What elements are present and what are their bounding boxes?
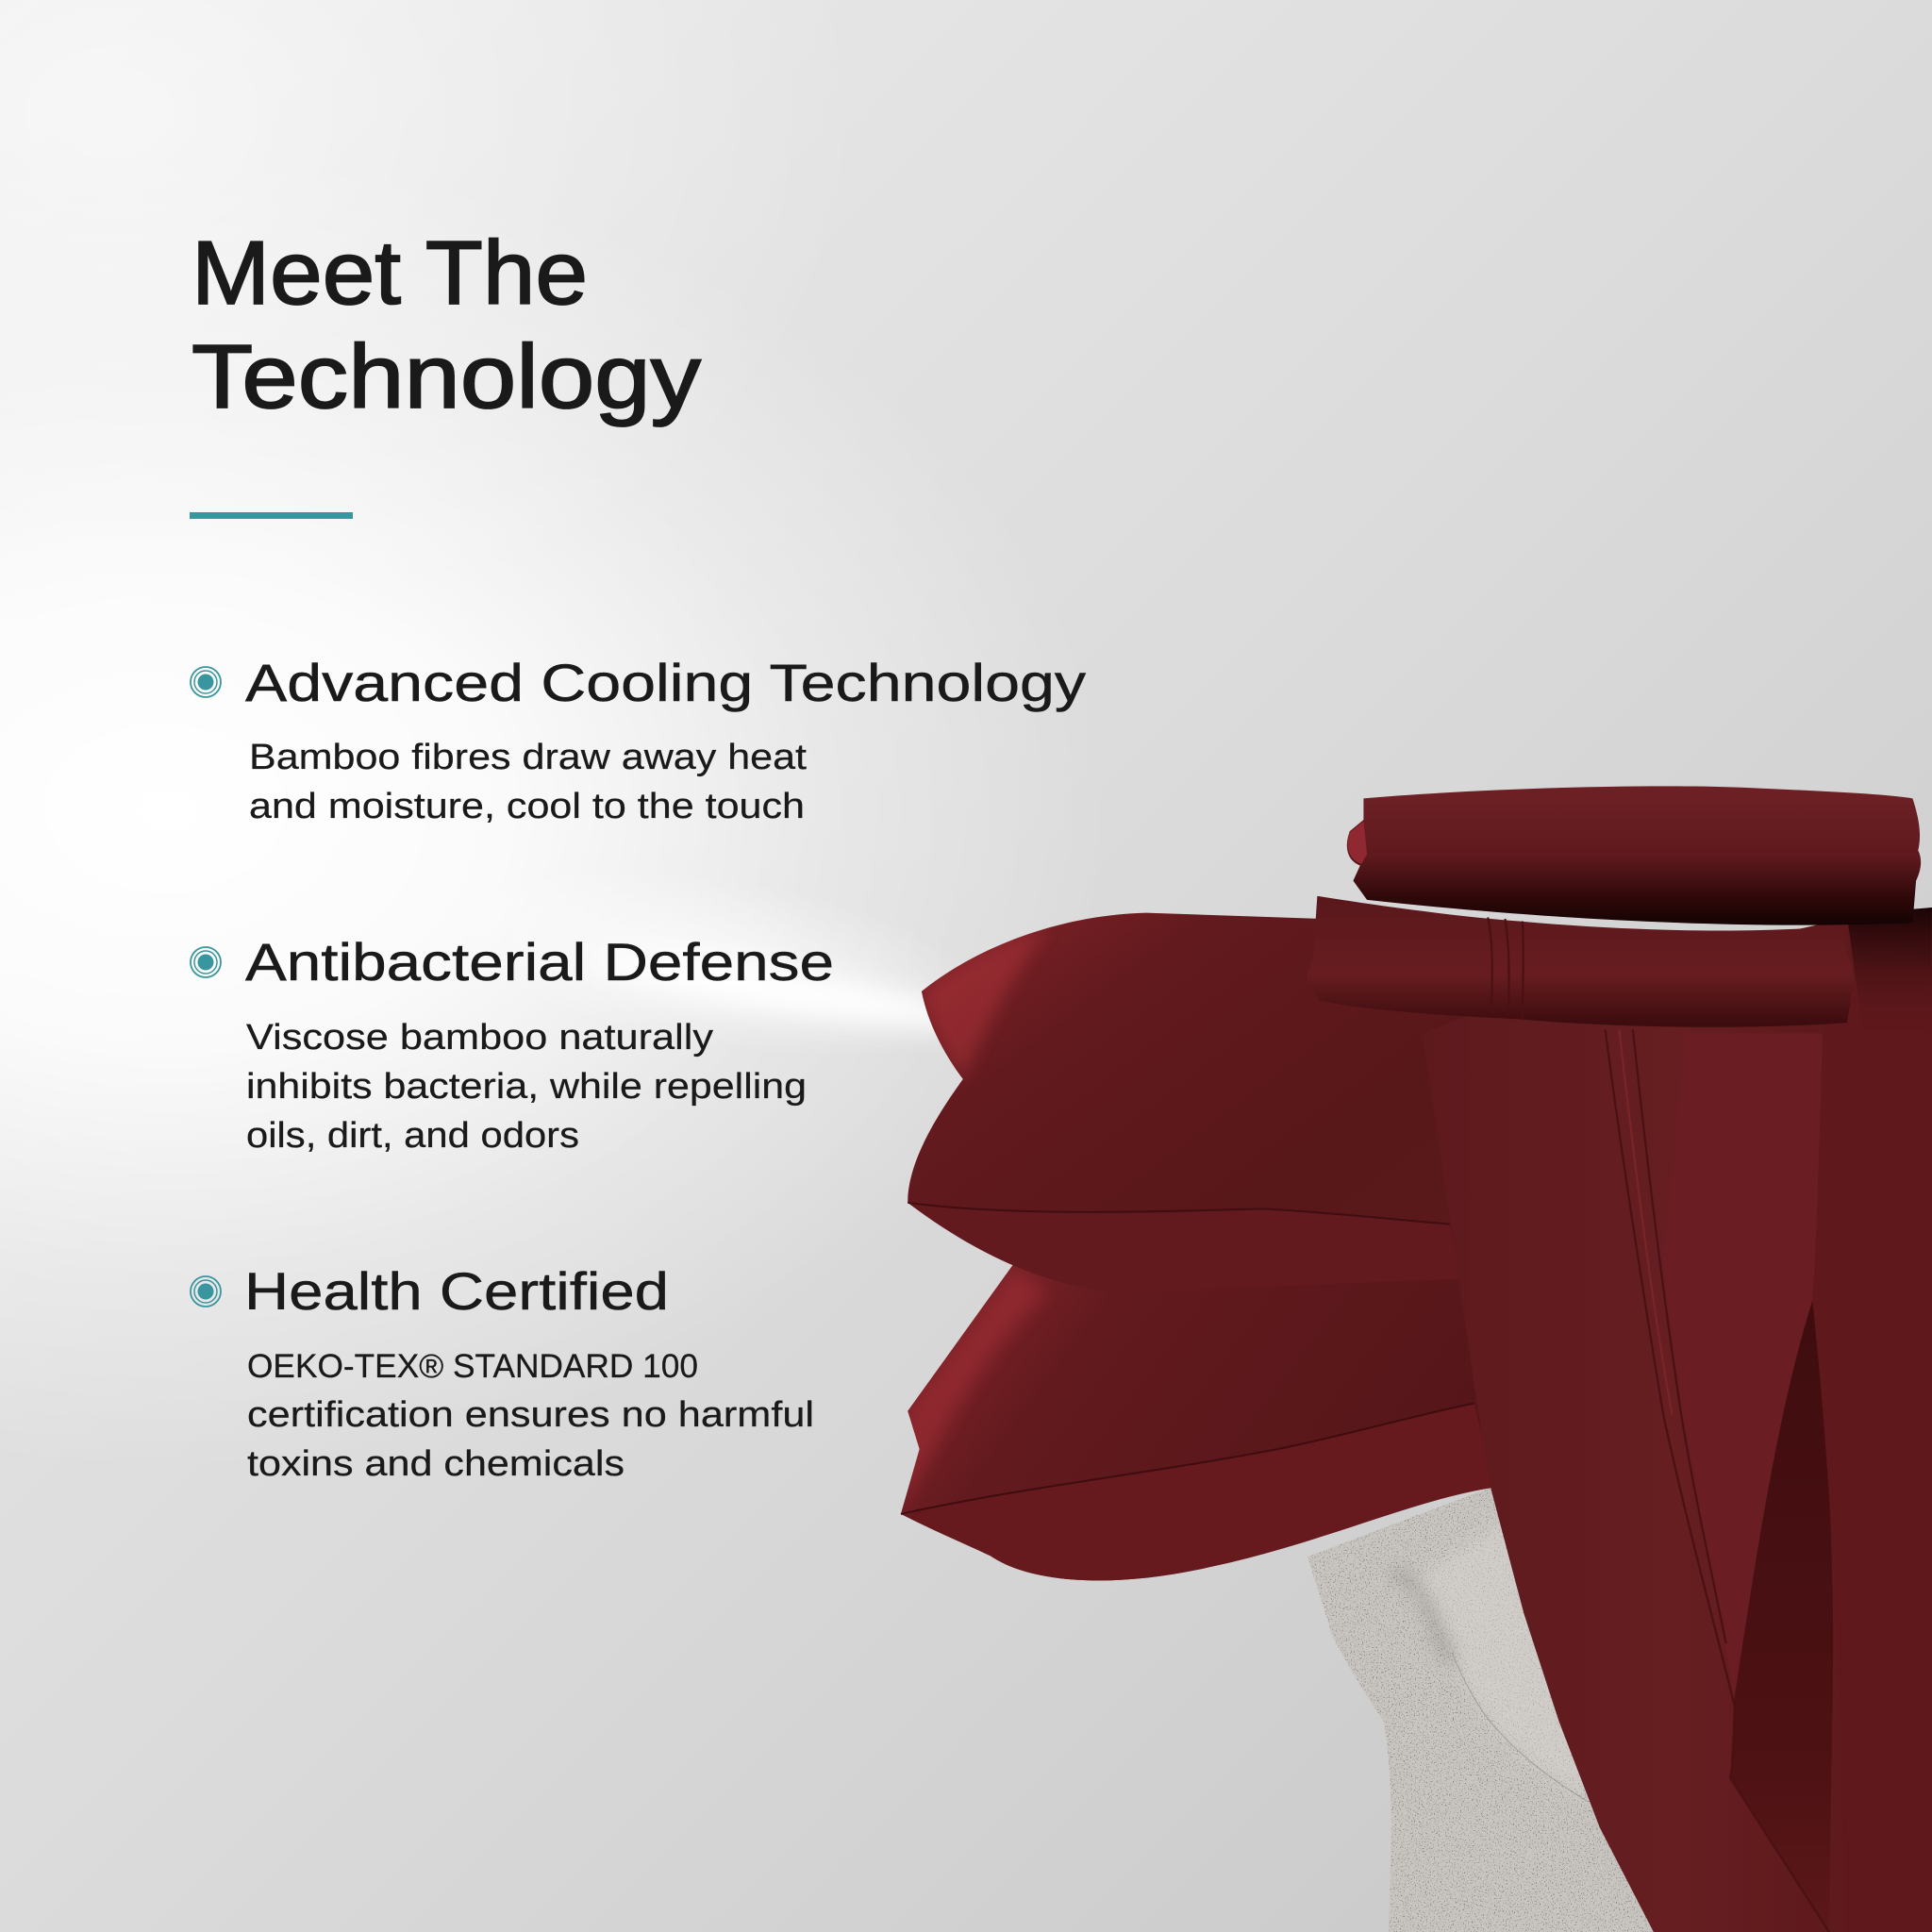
description: Bamboo fibres draw away heat <box>249 738 807 777</box>
heading: Advanced Cooling Technology <box>245 653 1086 712</box>
description <box>246 1018 807 1156</box>
lower pillow <box>901 1262 1495 1580</box>
description: and moisture, cool to the touch <box>249 787 805 826</box>
upper pillow <box>908 913 1466 1289</box>
heading: Antibacterial Defense <box>245 932 834 991</box>
description: OEKO-TEX® STANDARD 100 <box>247 1348 698 1385</box>
feature: advanced cooling <box>191 653 1086 826</box>
draped sheet <box>1423 908 1932 1932</box>
title divider <box>190 512 353 519</box>
title <box>192 223 701 427</box>
icon: target bullet <box>191 667 221 697</box>
folded pillowcase <box>1307 896 1854 1027</box>
icon: target bullet <box>191 947 221 977</box>
title: Meet The <box>192 223 588 324</box>
heading: Health Certified <box>244 1261 669 1321</box>
rolled sheet <box>1347 786 1921 925</box>
description: certification ensures no harmful <box>247 1395 814 1435</box>
description: toxins and chemicals <box>247 1444 625 1484</box>
icon: target bullet <box>191 1276 221 1307</box>
feature: antibacterial <box>191 932 834 1156</box>
title: Technology <box>192 326 701 427</box>
description <box>249 738 807 826</box>
stone bust <box>1307 1488 1660 1932</box>
description: Viscose bamboo naturally <box>246 1018 713 1058</box>
product photo: burgundy bedding on a stone bust <box>901 786 1932 1932</box>
description: inhibits bacteria, while repelling <box>246 1067 807 1107</box>
description <box>247 1348 814 1484</box>
feature: health certified <box>191 1261 814 1484</box>
description: oils, dirt, and odors <box>246 1116 579 1156</box>
